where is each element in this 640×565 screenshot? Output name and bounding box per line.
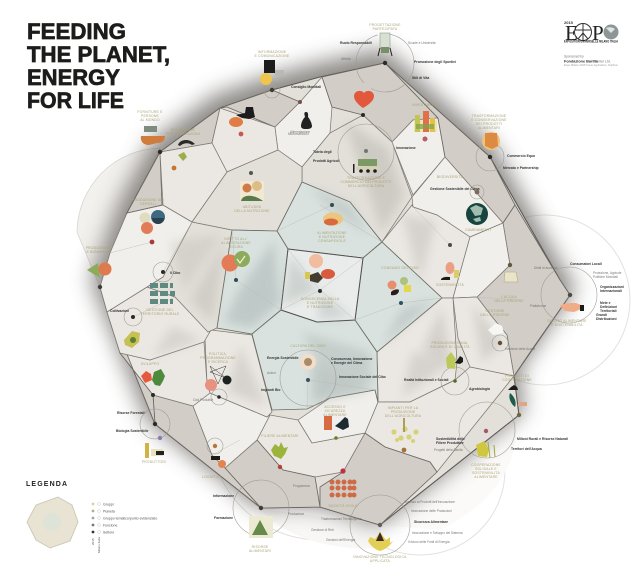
black node labels: Coltivazioni [110, 309, 129, 313]
icon: plants [124, 331, 140, 348]
icon: orange and tick [222, 251, 250, 272]
cell: yellow tree [365, 367, 514, 472]
black node labels: Attività [341, 57, 351, 61]
cell: plants [107, 287, 211, 360]
legend mini globe [27, 497, 78, 548]
olive category labels: POLITICA, [209, 352, 227, 356]
icon: yellow tree [391, 418, 419, 443]
olive category labels: DEI PRODOTTI [476, 122, 502, 126]
legend rows [91, 502, 157, 553]
cell: bottom of centre [252, 310, 378, 410]
cell: left of centre [217, 230, 288, 334]
cell: grey-blue left [147, 222, 232, 332]
black node labels: Il Cibo [170, 271, 180, 275]
legend [26, 481, 157, 553]
black node labels: Azioni [267, 371, 276, 375]
black node labels: Produzione [288, 512, 304, 516]
icon: heart [354, 91, 374, 108]
legend heading: LEGENDA [26, 481, 67, 488]
olive category labels: E CONSERVAZIONE [471, 118, 507, 122]
legend rows: Gruppo tematico/punto evidenziato [103, 516, 157, 520]
olive category labels: DELLA NUTRIZIONE [234, 209, 270, 213]
title: FEEDING [27, 19, 126, 44]
black node labels: Innovazione Sociale del Cibo [339, 375, 386, 379]
black node labels: Territori dell'Acqua [511, 447, 542, 451]
icon: yellow plant [476, 441, 495, 458]
cell: information [220, 90, 300, 127]
icon: globe [466, 203, 488, 225]
cell: hat [212, 108, 278, 172]
black node labels: Commercio Equo [507, 154, 535, 158]
black node labels: Prodotti Agricoli [313, 159, 339, 163]
title: FOR LIFE [27, 88, 124, 113]
icon: green house [249, 516, 273, 538]
black node labels: Il futuro delle Fonti di Energia [408, 540, 450, 544]
olive category labels: E COMUNICAZIONE [254, 54, 290, 58]
olive category labels: SICURA [229, 245, 244, 249]
facet shading [152, 122, 503, 406]
cell: truck [302, 115, 412, 242]
olive category labels: GESTIONE [485, 309, 505, 313]
icon: star network [205, 366, 232, 391]
Expo logo: P [592, 21, 604, 45]
legend rows: Funzione [103, 524, 117, 528]
cell: wheat dark [153, 395, 261, 508]
icon: wheat [145, 436, 164, 458]
cell: africa [453, 223, 510, 298]
olive category labels: E NUTRIZIONE [307, 301, 334, 305]
olive category labels: DELL'AGRICOLTURA [385, 414, 422, 418]
olive category labels: SICURA E DI QUALITÀ [430, 345, 470, 349]
olive category labels: PRODUZIONE [86, 246, 111, 250]
black node labels: Agrobiologia [469, 387, 490, 391]
olive category labels: PRODUZIONE SANA, [432, 341, 468, 345]
black node labels: Gestione delle Acque [505, 347, 535, 351]
olive category labels: SOSTENIBILITÀ [472, 471, 500, 475]
olive category labels: INNOVAZIONE TECNOLOGICA [353, 555, 407, 559]
sponsor credit: Expo Milano 2015 Food, Agriculture, Nutrition [564, 63, 618, 67]
icon: herb and flower [141, 369, 165, 386]
black node labels: Internazionali [600, 289, 622, 293]
olive category labels: TRASFORMAZIONE [472, 114, 507, 118]
black node labels: Filiere Produttive [436, 441, 464, 445]
black node labels: Politiche Mondiali [593, 275, 618, 279]
black node labels: Impianti Bio [261, 388, 280, 392]
Expo logo [564, 20, 618, 45]
olive category labels: CEREALI [140, 202, 156, 206]
cell: heart [322, 63, 438, 142]
black node labels: Formazione [214, 516, 233, 520]
Expo logo: E [565, 21, 578, 45]
cell: foods [277, 182, 382, 258]
olive category labels: E SOSTENIBILITÀ [551, 323, 583, 327]
olive category labels: L'ACQUA [501, 295, 518, 299]
Expo logo: 2015 [564, 20, 574, 25]
icon: bowls [140, 210, 165, 234]
title [27, 19, 170, 113]
olive category labels: ALIMENTAZIONE [221, 241, 251, 245]
olive category labels: FILIERE ALIMENTARI [261, 434, 299, 438]
legend rows: Gruppi [103, 502, 114, 506]
title: THE PLANET, [27, 42, 170, 67]
sponsor credit: Sponsored by [564, 54, 584, 58]
cell: bottom right dark [320, 433, 437, 525]
black node labels: Gestioni dell'Energia [326, 538, 355, 542]
black node labels: Micronutrizioni [288, 132, 309, 136]
icon: hat and food [229, 107, 255, 127]
black node labels: Promozione degli Sportivi [414, 60, 456, 64]
black node labels: Ruolo Responsabili [340, 41, 372, 45]
olive category labels: E NUTRIZIONE [319, 235, 346, 239]
icon: right white sketch [504, 272, 518, 282]
olive category labels: PRODUZIONE DEI [132, 198, 164, 202]
black node labels: Innovazione delle Produzioni [411, 509, 452, 513]
cell: right dark band [385, 63, 515, 223]
legend rows: Pianeta [103, 510, 115, 514]
cell: black bag [275, 77, 332, 167]
globe drop shadow [98, 56, 568, 518]
olive category labels: EDUCAZIONE [171, 128, 196, 132]
cell: left dark [100, 287, 155, 424]
black node labels [110, 41, 624, 544]
black node labels: Distribuzioni [596, 317, 617, 321]
black node labels: Realtà Istituzionali e Sociali [404, 378, 449, 382]
olive category labels: LOGISTICA [202, 475, 222, 479]
black node labels: Progetti della Sanità [434, 448, 463, 452]
cell: habits [192, 150, 302, 231]
icon: right composition [388, 277, 411, 295]
olive category labels: PERSONE [141, 114, 160, 118]
icon: solar grid [150, 283, 175, 304]
olive category labels: PROGETTAZIONE [369, 23, 401, 27]
sponsor credit: Fondazione Barilla [564, 60, 599, 64]
black node labels: Protezione, Agricole [593, 271, 622, 275]
black node labels: Cicli Produttivi [193, 398, 213, 402]
olive category labels [86, 23, 587, 563]
olive category labels: DELLE RISORSE [480, 313, 510, 317]
black node labels: Trasformazioni Tecnologiche [321, 517, 362, 521]
olive category labels: SICUREZZA [324, 409, 346, 413]
legend rows: Settore [103, 530, 114, 534]
olive category labels: E TRADIZIONE [307, 305, 334, 309]
olive category labels: ABITUDINI [243, 205, 261, 209]
black node labels: Conoscenza, Innovazione [331, 357, 373, 361]
black node labels: Risorse Forestali [117, 411, 145, 415]
black node labels: Diritti di Accesso [534, 266, 558, 270]
olive category labels: ALIMENTAZIONE [317, 231, 347, 235]
hub nodes [98, 61, 572, 527]
icons [87, 33, 584, 551]
olive category labels: ACCESSO E [324, 405, 346, 409]
olive category labels: SVILUPPO [141, 362, 159, 366]
black node labels: Informazione [213, 494, 234, 498]
large circles around hub nodes [124, 34, 597, 555]
cell: star [205, 330, 272, 417]
cell: bottom light [257, 415, 365, 477]
olive category labels: DELL'AGRICOLTURA [348, 184, 385, 188]
icon: plant and tool [446, 352, 463, 369]
cell: arm dark band [477, 205, 570, 376]
cell: light lower left [193, 393, 270, 468]
black node labels: Consiglio Mondiali [291, 85, 321, 89]
olive category labels: TRASFORMAZIONE E [347, 176, 386, 180]
black node labels: Biologia Sostenibile [116, 429, 149, 433]
olive category labels: PROGRAMMAZIONE [200, 356, 236, 360]
icon: rosette [300, 354, 316, 370]
olive category labels: PRODUZIONE [391, 410, 416, 414]
icon: loaf with hat [141, 126, 195, 161]
black node labels: Accesso ai Prodotti dell'Innovazione [404, 500, 455, 504]
cell: upper left light [160, 143, 227, 222]
olive category labels: CULTURA DEL CIBO [290, 344, 326, 348]
icon: arm [560, 303, 584, 312]
olive category labels: IMPIANTI PER LA [388, 406, 419, 410]
black node labels: Mete e [600, 301, 611, 305]
icon: food plate [323, 212, 343, 226]
olive category labels: INVESTIMENTI [412, 103, 438, 107]
icon: loaf [482, 132, 500, 150]
olive category labels: FORNITURE E [137, 110, 163, 114]
cell: herb [120, 342, 210, 406]
legend rows: Milano Italia [97, 537, 101, 553]
olive category labels: PER GENERAZIONI [166, 132, 200, 136]
cell: right of centre [355, 242, 442, 352]
sponsor credit: Center Ltd. [594, 60, 611, 64]
cell: sustainability [377, 298, 457, 402]
olive category labels: AL MONDO [140, 118, 160, 122]
olive category labels: SOCIETÀ CIVILE [328, 504, 358, 508]
icon: figure and shoe [441, 262, 459, 280]
Expo logo: EXPOSITION UNIVERSELLE MILANO ITALIA [564, 40, 618, 44]
olive category labels: CAMBIAMENTI [465, 228, 491, 232]
black node labels: Tutela degli [313, 150, 332, 154]
globe of faceted cells [100, 63, 570, 525]
black node labels: Scuole e Università [408, 41, 436, 45]
outer base [100, 63, 570, 525]
icon: habits people [240, 181, 264, 201]
olive category labels: APPLICATA [370, 559, 391, 563]
olive category labels: COOPERAZIONE [502, 378, 532, 382]
cell: bottom left dark [225, 440, 320, 508]
icon: chairs and animal [324, 416, 349, 430]
olive category labels: SOLIDALE E [475, 467, 497, 471]
cell: chairs [298, 390, 378, 443]
black node labels: e Energie del Clima [331, 361, 362, 365]
olive category labels: NELLE RISORSE [494, 299, 524, 303]
olive category labels: INFORMAZIONE [258, 50, 287, 54]
cell: dark triangle left [127, 152, 162, 213]
black node labels: Definizioni [600, 305, 617, 309]
cell: bowls [100, 205, 192, 312]
olive category labels: COOPERAZIONE [471, 463, 501, 467]
black node labels: Piattaforme [530, 304, 547, 308]
olive category labels: ALIMENTARI [249, 549, 271, 553]
black node labels: Consumatori Locali [570, 262, 602, 266]
black node labels: Energia Sostenibile [267, 356, 299, 360]
olive category labels: BIODIVERSITÀ [437, 175, 464, 179]
olive category labels: DIRITTO ALL' [224, 237, 248, 241]
icon: easel [378, 33, 392, 56]
icon: centre composition [305, 254, 335, 283]
olive category labels: CONSUMO DEL CIBO [381, 266, 419, 270]
cell: bar chart [392, 118, 445, 195]
olive category labels: COMMERCIO DEI PRODOTTI [341, 180, 391, 184]
black node labels: Mercato e Partnership [503, 166, 539, 170]
icon: bar chart [414, 111, 437, 132]
icon: truck [353, 159, 380, 173]
olive category labels: PROGETTI DI [505, 374, 529, 378]
cell: light right [382, 205, 470, 298]
cell: globe icon [412, 157, 503, 237]
icon: black bag [301, 112, 312, 129]
black node labels: Organizzazioni [600, 285, 624, 289]
olive category labels: ALIMENTARI [478, 126, 500, 130]
olive category labels: CONOSCENZA DELLA [301, 297, 340, 301]
olive category labels: DIRITTO ALIMENTARE [547, 319, 587, 323]
olive category labels: RISORSE [252, 545, 269, 549]
black node labels: Stili di Vita [412, 76, 429, 80]
legend rows: 2015 [91, 538, 95, 545]
black node labels: Alimentazione [290, 130, 310, 134]
olive category labels: PARTECIPATA [373, 27, 398, 31]
black node labels: Milioni Rurali e Risorse Naturali [517, 437, 568, 441]
black node labels: Gestione di Reti [311, 528, 334, 532]
icon: green plant [271, 442, 288, 459]
title: ENERGY [27, 65, 120, 90]
olive category labels: E BIOMASSA [87, 250, 110, 254]
olive category labels: ALIMENTARE [323, 413, 347, 417]
icon: people grid [330, 480, 356, 498]
black node labels: Sostenibilità delle [436, 437, 465, 441]
icon: fruit left [87, 262, 112, 278]
olive category labels: E RICERCA [208, 360, 229, 364]
black node labels: Programma [293, 484, 310, 488]
cell: centre [281, 249, 363, 322]
icon: leaf and hat [508, 385, 527, 407]
olive category labels: TERRITORIO RURALE [141, 312, 180, 316]
olive category labels: ALIMENTARE [474, 475, 498, 479]
icon: information [260, 60, 284, 85]
black node labels: Gestione Sostenibile del Clima [430, 187, 480, 191]
black node labels: Innovazione e Sviluppo del Sistema [412, 531, 463, 535]
olive category labels: GESTIONE DEL [146, 308, 174, 312]
black node labels: Sicurezza Alimentare [414, 520, 448, 524]
olive category labels: CONSAPEVOLE [318, 239, 346, 243]
faint outer orbit circles [77, 148, 630, 555]
olive category labels: SOSTENIBILITÀ [436, 283, 464, 287]
sponsor credit [564, 54, 618, 67]
black node labels: Territoriali [600, 309, 617, 313]
black node labels: Grandi [596, 313, 607, 317]
cell: right middle [453, 297, 514, 376]
icon: lotus [368, 532, 393, 551]
icon: black tool and orange [211, 456, 226, 468]
olive category labels: PRODUTTORI [142, 460, 166, 464]
thin facet lines [110, 205, 519, 455]
cell: strip top left [160, 108, 220, 152]
black node labels: Innovazione [396, 146, 416, 150]
icon: white sketch [488, 323, 504, 335]
